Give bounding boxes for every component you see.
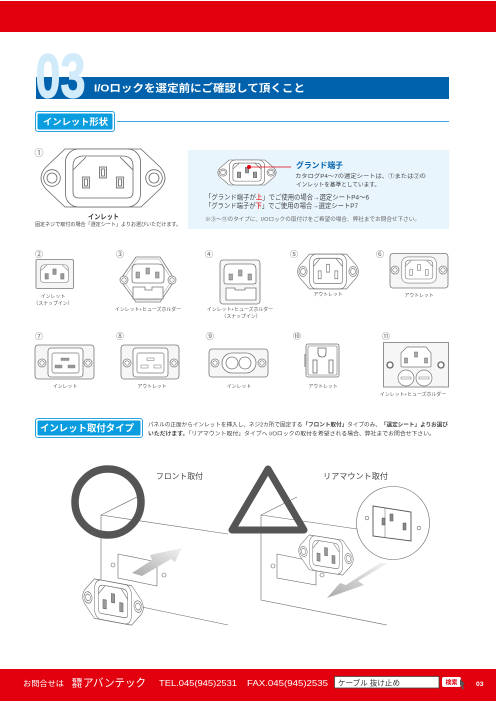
diagram: front mount — [75, 469, 228, 627]
item 11: inlet with dual fuse holder: ⑪ — [382, 332, 390, 341]
circle mark — [75, 469, 141, 535]
mounting description: いただけます。「リアマウント取付」タイプへ I/Oロックの取付を希望される場合、弊社までお問合せ下さい。 — [148, 430, 435, 438]
icon: cursor — [460, 679, 465, 689]
item 8: C19 outlet: アウトレット — [137, 383, 167, 390]
ground terminal description — [295, 172, 426, 188]
item 3: inlet with fuse holder: ③ — [116, 250, 124, 259]
search box: ケーブル 抜け止め — [338, 678, 400, 688]
item 2: snap-in inlet: ② — [35, 250, 43, 259]
cutout — [277, 554, 316, 585]
item 10: NEMA outlet: ⑩ — [293, 332, 301, 341]
ground terminal description: カタログP4〜7の選定シートは、①または②の — [295, 172, 426, 180]
item 2: snap-in inlet: （スナップイン） — [33, 301, 73, 307]
item 10: NEMA outlet — [293, 332, 339, 390]
arrow: removal — [327, 563, 388, 598]
item 5: outlet flange: ⑤ — [290, 250, 298, 259]
inlet caption: 固定ネジで取付の場合「選定シート」よりお選びいただけます。 — [35, 220, 181, 228]
top red band — [0, 1, 496, 32]
search button — [442, 677, 461, 687]
selection sheet rules: 「グランド端子が下」でご使用の場合→選定シートP7 — [205, 201, 358, 210]
item 4: snap-in inlet with fuse holder: ④ — [205, 250, 213, 259]
item 1: main inlet: ① — [34, 148, 44, 158]
phone numbers: TEL.045(945)2531 — [159, 679, 238, 688]
item 4: snap-in inlet with fuse holder: インレット+ヒューズホルダー — [207, 306, 273, 313]
arrow: insertion — [132, 548, 182, 576]
note: ※③〜⑪のタイプに、I/Oロックの取付けをご希望の場合、弊社までお問合せ下さい。 — [205, 215, 420, 223]
tag: inlet shape: インレット形状 — [43, 116, 108, 127]
item 2: snap-in inlet — [33, 250, 74, 307]
section number 03: 03 — [36, 42, 86, 112]
heading text: I/Oロックを選定前にご確認して頂くこと — [94, 82, 305, 94]
diagram: rear mount — [232, 469, 430, 625]
icon: rear connector — [299, 533, 353, 577]
panel outline — [261, 497, 387, 625]
item 6: outlet square flange: アウトレット — [404, 292, 434, 299]
rear mount label: リアマウント取付 — [323, 471, 388, 481]
panel: ground terminal note — [188, 150, 449, 229]
company name: アバンテック — [83, 676, 146, 690]
item 9: C8 inlet: ⑨ — [206, 332, 214, 341]
item 11: inlet with dual fuse holder — [380, 332, 448, 398]
contact lead: お問合せは — [23, 678, 65, 688]
tag: inlet mounting type: インレット取付タイプ — [40, 422, 134, 434]
cutout — [118, 554, 157, 586]
ground terminal description: インレットを基準としています。 — [296, 180, 380, 188]
item 8: C19 outlet: ⑧ — [116, 332, 124, 341]
company name: 有限 — [72, 677, 83, 684]
triangle mark — [232, 469, 304, 530]
item 4: snap-in inlet with fuse holder: （スナップイン） — [221, 314, 261, 320]
item 7: C20 inlet: ⑦ — [35, 332, 43, 341]
heading bar — [36, 77, 449, 99]
item 8: C19 outlet — [116, 332, 179, 390]
selection sheet rules: 「グランド端子が上」でご使用の場合→選定シートP4〜6 — [205, 192, 369, 202]
inlet label: インレット — [88, 213, 119, 221]
company name: 会社 — [72, 682, 83, 689]
item 4: snap-in inlet with fuse holder — [205, 250, 273, 320]
ground terminal pointer — [247, 165, 291, 169]
item 9: C8 inlet — [206, 332, 268, 390]
page number: 03 — [476, 681, 484, 688]
search box — [334, 676, 439, 688]
footer band: FAX.045(945)2535 — [247, 679, 329, 688]
item 6: outlet square flange: ⑥ — [376, 250, 384, 259]
panel outline — [101, 497, 228, 625]
search button: 検索 — [446, 678, 458, 686]
front mount label: フロント取付 — [156, 471, 203, 481]
item 1: main inlet — [34, 148, 181, 228]
section heading — [36, 42, 449, 112]
tag: inlet shape — [36, 112, 114, 132]
icon: front connector — [83, 577, 143, 627]
item 5: outlet flange: アウトレット — [313, 291, 343, 298]
footer band — [0, 669, 496, 701]
tag: inlet mounting type — [36, 418, 142, 438]
item 7: C20 inlet: インレット — [53, 385, 77, 390]
item 5: outlet flange — [290, 250, 358, 298]
item 3: inlet with fuse holder: インレット+ヒューズホルダー — [115, 306, 181, 313]
item 3: inlet with fuse holder — [115, 250, 181, 313]
mounting description — [148, 420, 448, 438]
item 11: inlet with dual fuse holder: インレット+ヒューズホルダー — [380, 391, 446, 398]
icon: small connector — [218, 160, 276, 185]
lens detail — [356, 486, 430, 560]
item 2: snap-in inlet: インレット — [41, 295, 65, 300]
ground terminal heading: グランド端子 — [296, 160, 343, 170]
selection sheet rules — [205, 192, 369, 210]
icon: inlet connector — [41, 149, 165, 207]
item 9: C8 inlet: インレット — [227, 385, 251, 390]
item 6: outlet square flange — [376, 250, 448, 299]
item 7: C20 inlet — [35, 332, 94, 390]
mounting description: パネルの正面からインレットを挿入し、ネジ2カ所で固定する「フロント取付」タイプのみ、「選定シート」よりお選び — [148, 420, 448, 428]
item 10: NEMA outlet: アウトレット — [308, 383, 338, 390]
